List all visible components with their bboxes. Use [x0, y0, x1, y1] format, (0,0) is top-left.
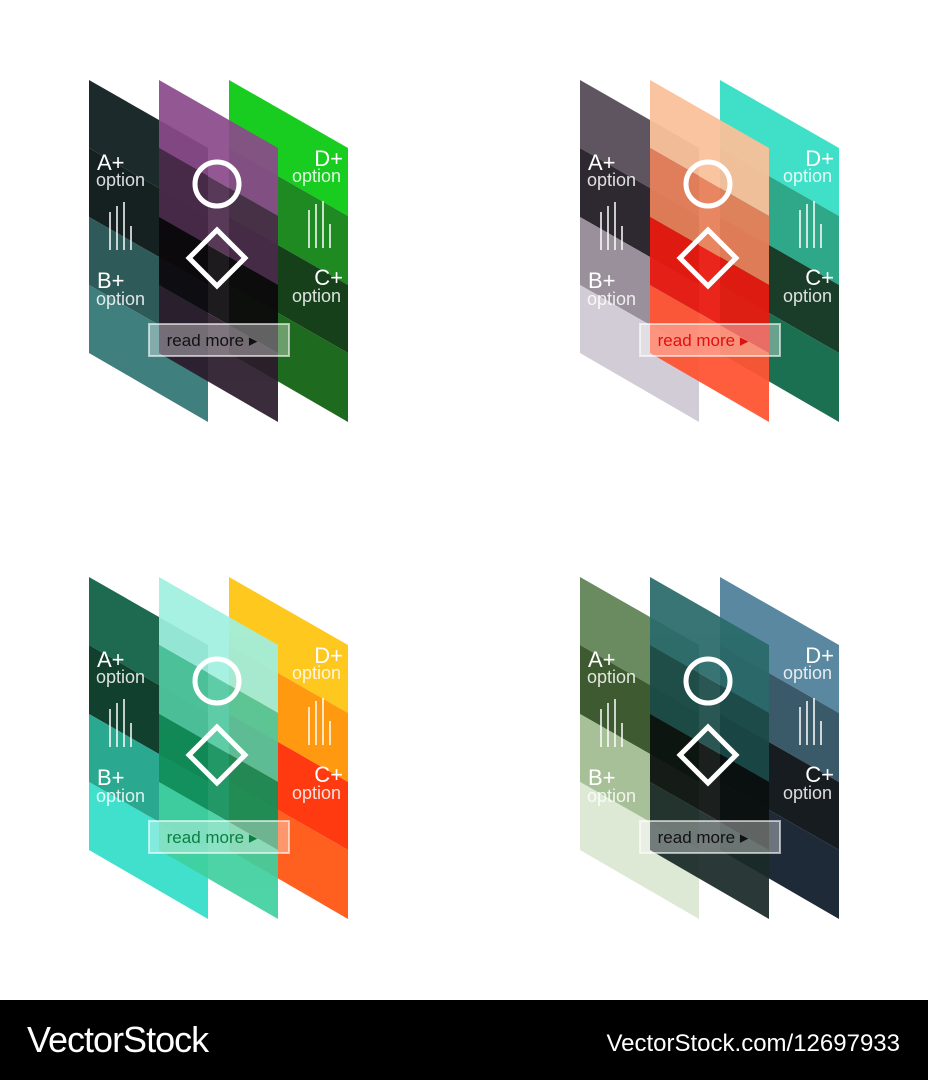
label D+: [292, 146, 343, 186]
label B+: [96, 765, 145, 806]
overlay content group 3: [96, 643, 343, 853]
label A+: [587, 647, 636, 687]
label B+: B+: [97, 268, 125, 293]
icon: bars right: [309, 201, 330, 248]
label A+: A+: [588, 150, 616, 175]
footer logo: VectorStock: [27, 1019, 210, 1060]
label C+: [292, 762, 343, 803]
middle strip: [650, 577, 769, 919]
panel: group 4 (olive/teal/slate): [580, 577, 839, 919]
footer url: VectorStock.com/12697933: [606, 1030, 900, 1057]
footer bar: [0, 1000, 928, 1080]
label A+: option: [587, 667, 636, 687]
left strip: [89, 577, 208, 919]
label A+: option: [96, 667, 145, 687]
icon: bars left: [601, 202, 622, 250]
button: read more: read more ▸: [167, 331, 258, 350]
label B+: [587, 765, 636, 806]
label B+: B+: [588, 268, 616, 293]
label B+: option: [587, 289, 636, 309]
label D+: option: [783, 166, 832, 186]
label D+: [783, 643, 834, 683]
label A+: [96, 150, 145, 190]
label A+: A+: [588, 647, 616, 672]
icon: bars right: [309, 698, 330, 745]
label B+: B+: [588, 765, 616, 790]
label C+: option: [292, 783, 341, 803]
label A+: [96, 647, 145, 687]
middle strip: [159, 80, 278, 422]
right strip: [229, 80, 348, 422]
label C+: C+: [314, 265, 343, 290]
label C+: C+: [805, 265, 834, 290]
button: read more: read more ▸: [658, 331, 749, 350]
overlay content group 2: [587, 146, 834, 356]
label B+: option: [587, 786, 636, 806]
icon: diamond: [189, 230, 245, 286]
icon: circle: [195, 659, 239, 703]
icon: diamond: [680, 230, 736, 286]
right strip: [720, 577, 839, 919]
panel: group 1 (dark/purple/green): [89, 80, 348, 422]
button: read more: [640, 821, 780, 853]
icon: circle: [686, 162, 730, 206]
label A+: option: [587, 170, 636, 190]
button: read more: [149, 821, 289, 853]
label B+: [587, 268, 636, 309]
middle strip: [650, 80, 769, 422]
icon: diamond: [680, 727, 736, 783]
label D+: D+: [805, 643, 834, 668]
label C+: [292, 265, 343, 306]
button: read more: read more ▸: [658, 828, 749, 847]
icon: circle: [686, 659, 730, 703]
label C+: [783, 762, 834, 803]
label C+: C+: [314, 762, 343, 787]
left strip: [89, 80, 208, 422]
label A+: A+: [97, 647, 125, 672]
label A+: A+: [97, 150, 125, 175]
icon: bars right: [800, 201, 821, 248]
icon: bars left: [110, 202, 131, 250]
overlay content group 1: [96, 146, 343, 356]
label B+: B+: [97, 765, 125, 790]
label D+: option: [292, 663, 341, 683]
icon: circle: [195, 162, 239, 206]
label C+: option: [783, 783, 832, 803]
button: read more: [149, 324, 289, 356]
label C+: option: [783, 286, 832, 306]
label D+: option: [783, 663, 832, 683]
label B+: option: [96, 786, 145, 806]
panel: group 2 (grey/orange/teal): [580, 80, 839, 422]
label D+: option: [292, 166, 341, 186]
label C+: C+: [805, 762, 834, 787]
overlay content group 4: [587, 643, 834, 853]
label B+: [96, 268, 145, 309]
icon: bars right: [800, 698, 821, 745]
label B+: option: [96, 289, 145, 309]
right strip: [229, 577, 348, 919]
left strip: [580, 577, 699, 919]
right strip: [720, 80, 839, 422]
label A+: [587, 150, 636, 190]
label A+: option: [96, 170, 145, 190]
icon: bars left: [110, 699, 131, 747]
label C+: [783, 265, 834, 306]
left strip: [580, 80, 699, 422]
label D+: [292, 643, 343, 683]
middle strip: [159, 577, 278, 919]
icon: bars left: [601, 699, 622, 747]
label C+: option: [292, 286, 341, 306]
icon: diamond: [189, 727, 245, 783]
button: read more: read more ▸: [167, 828, 258, 847]
label D+: D+: [314, 643, 343, 668]
button: read more: [640, 324, 780, 356]
label D+: D+: [805, 146, 834, 171]
panel: group 3 (teal/mint/orange): [89, 577, 348, 919]
label D+: D+: [314, 146, 343, 171]
label D+: [783, 146, 834, 186]
